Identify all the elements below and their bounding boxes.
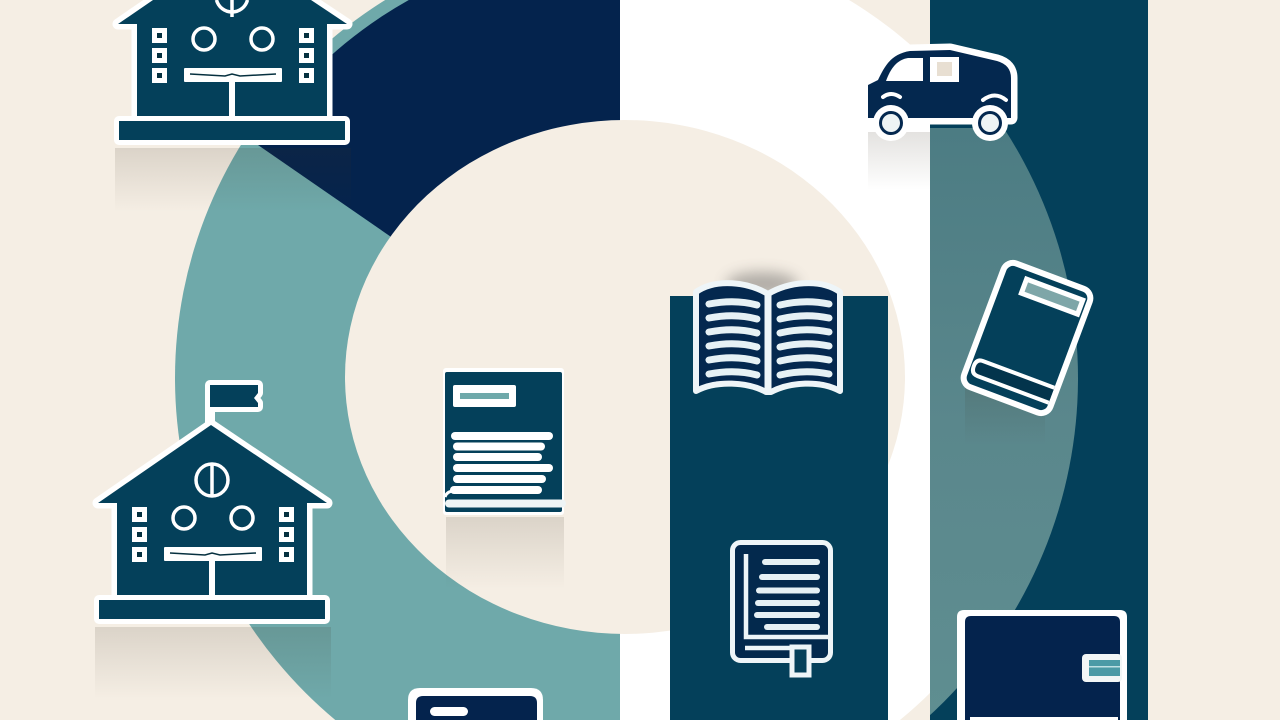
wallet lower edge [970, 717, 1118, 720]
shadow under tilted book [965, 385, 1045, 445]
school door [164, 547, 262, 598]
shadow under lower school [95, 627, 331, 699]
tilted book cover [961, 260, 1093, 416]
panel: navy ring segment [258, 0, 620, 236]
school right windows [299, 28, 314, 83]
document text lines [454, 436, 549, 490]
panel: teal ring segment [170, 0, 620, 720]
icon: van [868, 50, 1011, 141]
card pill [430, 707, 468, 716]
wallet body [965, 616, 1120, 720]
open book pages [696, 283, 840, 392]
notebook spine [745, 554, 830, 648]
van outline [868, 50, 1011, 118]
wallet border [957, 610, 1127, 720]
open book left lines [709, 302, 757, 375]
wallet clasp [1082, 654, 1122, 682]
icon: upper school building [118, 0, 347, 140]
van wheels [873, 105, 1008, 141]
bar: right column [930, 0, 1148, 720]
card body [416, 696, 537, 720]
school left windows [152, 28, 167, 83]
icon: notebook with bookmark [732, 542, 830, 675]
icon: bottom card [408, 688, 543, 720]
document page edge [449, 500, 562, 508]
icon: lower school building [98, 385, 327, 619]
van front window [886, 58, 923, 81]
shadow under van [868, 132, 930, 190]
icon: document book [443, 368, 564, 515]
notebook bookmark [792, 647, 809, 675]
document label [453, 385, 516, 407]
open book spine [764, 294, 772, 392]
school base [119, 121, 345, 140]
school emblem [193, 0, 273, 50]
school right windows [279, 507, 294, 562]
school base [99, 600, 325, 619]
school left windows [132, 507, 147, 562]
shadow under document book [446, 517, 564, 589]
school body [118, 0, 347, 118]
school emblem [173, 464, 253, 529]
document cover fill [445, 372, 562, 512]
tilted book pages [971, 359, 1054, 403]
panel: centre cream circle [345, 120, 905, 634]
shadow above open book [726, 272, 798, 296]
van rear window [930, 57, 959, 82]
tilted book label [1021, 279, 1083, 314]
flag [210, 385, 258, 428]
shadow under upper school [115, 148, 351, 212]
icon: tilted book [961, 260, 1093, 416]
panel: white ring segment [620, 0, 930, 720]
van fender arcs [883, 94, 1006, 100]
school body [98, 425, 327, 597]
icon: wallet [957, 610, 1127, 720]
document spine curve [445, 491, 454, 497]
school door [184, 68, 282, 119]
card border [408, 688, 543, 720]
notebook text lines [757, 562, 817, 627]
icon: open book [696, 283, 840, 392]
notebook cover [732, 542, 830, 660]
bar: centre column [670, 296, 888, 720]
panel: lighter ring overlay on right column [930, 128, 1078, 715]
document cover [443, 368, 564, 515]
open book right lines [780, 302, 829, 375]
